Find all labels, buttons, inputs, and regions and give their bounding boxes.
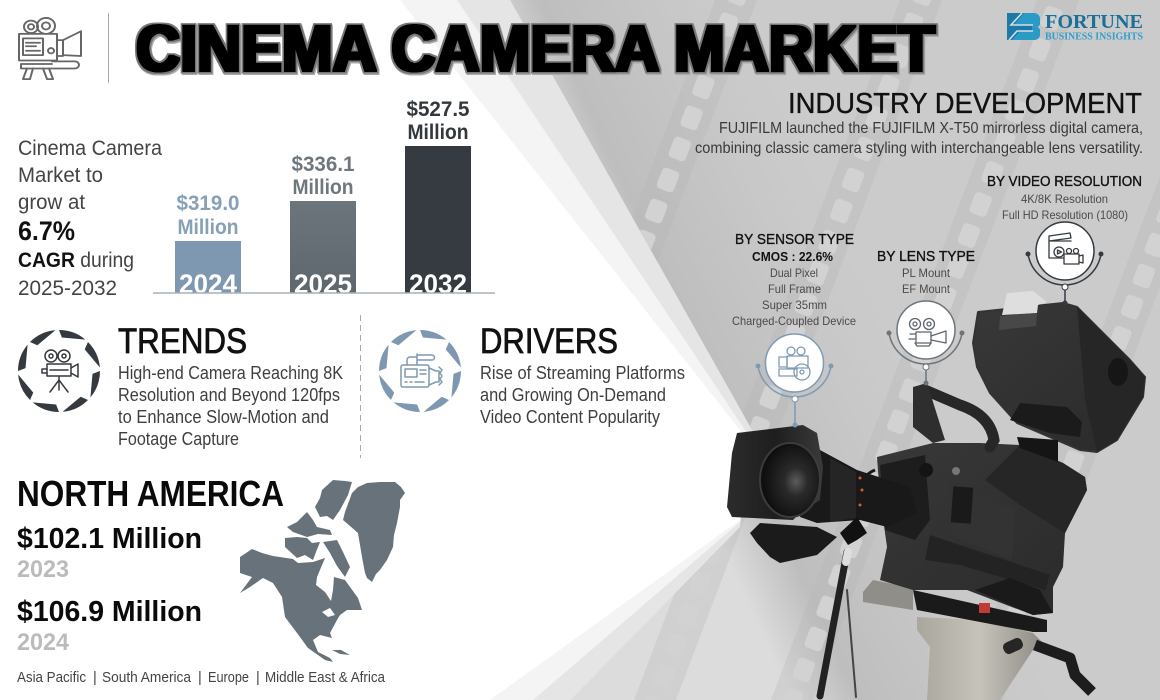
text: lens list: PL Mount — [902, 266, 951, 280]
bar 2025: Million — [292, 176, 354, 199]
bar 2032: $527.5 — [406, 98, 470, 121]
text: lens list: BY LENS TYPE — [877, 249, 975, 265]
text: sensor list: Dual Pixel — [770, 266, 818, 280]
other regions list: Asia Pacific — [17, 670, 86, 686]
text: drivers body: Video Content Popularity — [480, 407, 660, 427]
bar 2024: Million — [178, 216, 238, 239]
CAGR text block: Cinema Camera — [18, 137, 162, 160]
text: sensor list — [732, 232, 856, 328]
other regions list: Middle East & Africa — [265, 670, 386, 686]
lens mount block — [840, 517, 867, 545]
logo: Fortune Business Insights: BUSINESS INSIGHTS — [1045, 32, 1143, 42]
bar 2032: Million — [408, 121, 468, 144]
CAGR text block: 2025-2032 — [18, 277, 117, 300]
text: resolution list: BY VIDEO RESOLUTION — [987, 174, 1142, 190]
text: trends body — [118, 363, 343, 449]
icon: clapperboard — [1026, 222, 1104, 306]
text: industry development body — [695, 120, 1143, 157]
other regions list: | — [198, 670, 202, 686]
bar 2032: 2032 — [409, 269, 467, 299]
text: trends body: Resolution and Beyond 120fps — [118, 385, 340, 405]
icon: trends iris with camera — [11, 323, 107, 419]
CAGR text block: CAGR during — [18, 249, 134, 272]
panel: trends — [11, 322, 343, 449]
text: sensor list: Super 35mm — [762, 298, 827, 312]
callout: by sensor type — [732, 232, 856, 428]
other regions list: Europe — [208, 670, 249, 686]
panel: north america — [17, 473, 405, 686]
other regions list: | — [256, 670, 260, 686]
value 2024: $106.9 Million — [17, 596, 202, 628]
value 2023 — [17, 523, 202, 583]
bar 2025: 2025 — [294, 269, 352, 299]
CAGR text block: Market to — [18, 164, 103, 187]
text: resolution list: 4K/8K Resolution — [1021, 192, 1108, 206]
header divider — [108, 13, 110, 83]
CAGR text block — [18, 137, 162, 300]
icon: movie camera — [886, 301, 964, 386]
title: CINEMA CAMERA MARKET — [136, 11, 935, 85]
CAGR text block: 6.7% — [18, 216, 75, 246]
icon: cinema camera header — [19, 18, 81, 79]
text: resolution list — [987, 174, 1142, 222]
text: drivers body — [480, 363, 685, 427]
logo: Fortune Business Insights: FORTUNE — [1045, 11, 1143, 33]
text: resolution list: Full HD Resolution (1080) — [1002, 208, 1128, 222]
handle — [913, 383, 994, 447]
value 2024: 2024 — [17, 629, 70, 656]
base plate — [863, 580, 1047, 632]
icon: film reel camera — [756, 334, 834, 428]
text: trends body: Footage Capture — [118, 429, 239, 449]
heading: industry development: INDUSTRY DEVELOPMENT — [788, 88, 1142, 120]
bar 2032 — [405, 98, 471, 299]
lens grip — [750, 523, 837, 563]
heading: north america: NORTH AMERICA — [17, 473, 284, 514]
panel: drivers — [372, 322, 685, 427]
panel: industry development — [695, 88, 1143, 157]
other regions list — [17, 670, 386, 686]
text: trends body: to Enhance Slow-Motion and — [118, 407, 329, 427]
monitor mount — [1010, 403, 1082, 462]
text: lens list: EF Mount — [902, 282, 951, 296]
lens barrel — [800, 450, 917, 527]
bar 2024 — [175, 192, 241, 299]
bar 2025 — [290, 153, 356, 299]
text: drivers body: and Growing On-Demand — [480, 385, 666, 405]
viewfinder monitor — [973, 291, 1145, 452]
CAGR text block: grow at — [18, 191, 85, 214]
value 2024 — [17, 596, 202, 656]
value 2023: $102.1 Million — [17, 523, 202, 555]
bar chart: market size — [153, 98, 495, 299]
lens hood — [727, 425, 823, 520]
text: sensor list: CMOS : 22.6% — [752, 250, 833, 264]
film strips in background — [634, 16, 906, 700]
callout: by lens type — [877, 249, 975, 386]
bar 2024: 2024 — [179, 269, 237, 299]
other regions list: South America — [102, 670, 192, 686]
bar 2024: $319.0 — [176, 192, 240, 215]
tripod rod and cable — [820, 552, 856, 697]
text: sensor list: Charged-Coupled Device — [732, 314, 856, 328]
bar 2025: $336.1 — [292, 153, 355, 176]
text: drivers body: Rise of Streaming Platforms — [480, 363, 685, 383]
icon: drivers iris with video camera — [372, 323, 468, 419]
value 2023: 2023 — [17, 556, 69, 583]
dashed divider — [360, 315, 362, 458]
map: north america — [240, 480, 405, 662]
heading: trends: TRENDS — [118, 322, 247, 361]
camera body — [857, 443, 1087, 615]
text: sensor list: BY SENSOR TYPE — [735, 232, 854, 248]
text: sensor list: Full Frame — [768, 282, 821, 296]
text: lens list — [877, 249, 975, 296]
text: trends body: High-end Camera Reaching 8K — [118, 363, 343, 383]
callout: by video resolution — [987, 174, 1142, 306]
other regions list: | — [93, 670, 97, 686]
heading: drivers: DRIVERS — [480, 322, 618, 361]
tripod head — [917, 617, 1092, 700]
photo: broadcast cinema camera on tripod — [727, 291, 1145, 700]
logo: Fortune Business Insights — [1007, 11, 1143, 42]
